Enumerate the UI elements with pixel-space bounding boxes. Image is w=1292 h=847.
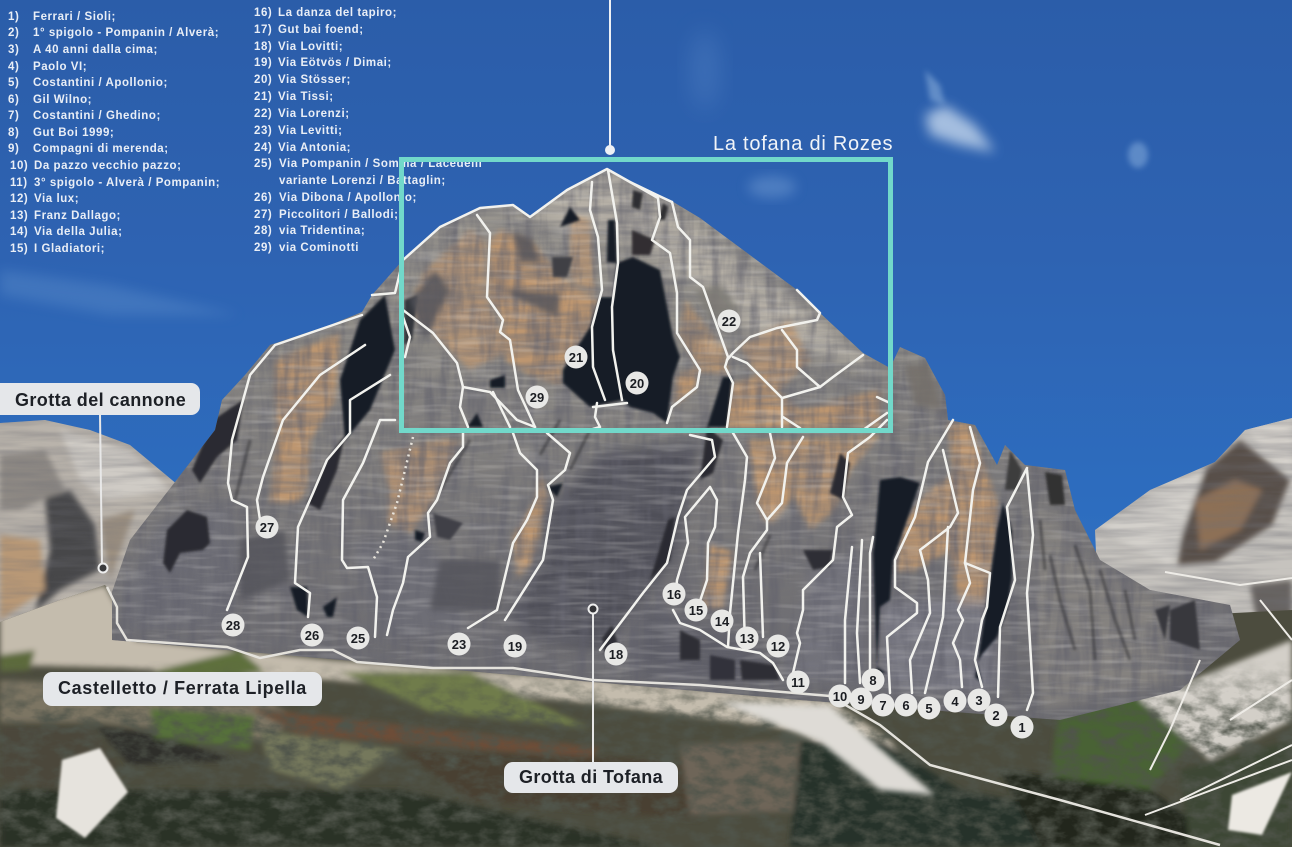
- foreground slopes and forest: [0, 560, 1292, 847]
- route list: column 2: 18): [254, 41, 272, 53]
- grey lower rock: [125, 500, 1180, 710]
- main rock massif: [112, 170, 1240, 720]
- right hills: [1095, 418, 1292, 690]
- route list: column 2: 25): [254, 158, 272, 170]
- route number markers: 11: [791, 675, 805, 690]
- callout: Grotta del cannone: [0, 383, 200, 572]
- right hills shading: [1095, 418, 1292, 613]
- callout: Grotta del cannone: Grotta del cannone: [15, 390, 186, 410]
- route number markers: 14: [715, 614, 730, 629]
- route list: column 1: 5): [8, 77, 19, 89]
- route list: column 2: Piccolitori / Ballodi;: [279, 209, 398, 221]
- route list: column 1: 13): [10, 210, 28, 222]
- route number markers: 18: [609, 647, 623, 662]
- route list: column 1: Compagni di merenda;: [33, 143, 169, 155]
- heading: La tofana di Rozes: La tofana di Rozes: [713, 133, 893, 155]
- rock strata texture: [120, 172, 1180, 696]
- route number markers: 4: [951, 694, 959, 709]
- route number markers: 1: [1018, 720, 1026, 735]
- route list: column 1: 4): [8, 61, 19, 73]
- route list: column 2: 22): [254, 108, 272, 120]
- route list: column 1: Via lux;: [34, 193, 79, 205]
- route number markers: [222, 310, 1034, 738]
- route list: column 2: Via Lorenzi;: [278, 108, 350, 120]
- route number markers: 16: [667, 587, 681, 602]
- route list: column 2: 26): [254, 192, 272, 204]
- route list: column 1: 3° spigolo - Alverà / Pompanin;: [34, 177, 220, 189]
- route list: column 2: 19): [254, 57, 272, 69]
- left hills shading: [0, 415, 180, 630]
- route number markers: 21: [569, 350, 583, 365]
- route list: column 1: 11): [10, 177, 28, 189]
- dark grey blotches: [240, 232, 942, 610]
- route list: column 1: Paolo VI;: [33, 61, 87, 73]
- route list: column 2: Via Tissi;: [278, 91, 334, 103]
- route number markers: 15: [689, 603, 703, 618]
- route number markers: 3: [975, 693, 983, 708]
- route number markers: 7: [879, 698, 887, 713]
- route list: column 1: Franz Dallago;: [34, 210, 121, 222]
- route list: column 2: Gut bai foend;: [278, 24, 364, 36]
- route list: column 1: 9): [8, 143, 19, 155]
- highlight box: La tofana di Rozes: [402, 160, 890, 430]
- route list: column 1: 12): [10, 193, 28, 205]
- route list: column 2: 27): [254, 209, 272, 221]
- route list: column 2: via Tridentina;: [279, 225, 365, 237]
- route list: column 1: I Gladiatori;: [34, 243, 105, 255]
- route list: column 2: [254, 7, 482, 254]
- dark cliffs and shadows: [163, 190, 1200, 683]
- route list: column 2: 23): [254, 125, 272, 137]
- route list: column 1: A 40 anni dalla cima;: [33, 44, 158, 56]
- route number markers: 27: [260, 520, 274, 535]
- route list: column 2: La danza del tapiro;: [278, 7, 397, 19]
- route list: column 1: 7): [8, 110, 19, 122]
- route list: column 2: Via Pompanin / Somma / Lacedelli: [279, 158, 482, 170]
- route list: column 1: Ferrari / Sioli;: [33, 11, 116, 23]
- route list: column 2: via Cominotti: [279, 242, 359, 254]
- route list: column 2: Via Dibona / Apollonio;: [279, 192, 417, 204]
- route number markers: 29: [530, 390, 544, 405]
- route list: column 1: Da pazzo vecchio pazzo;: [34, 160, 181, 172]
- route list: column 1: Costantini / Ghedino;: [33, 110, 161, 122]
- callout line to highlighted area: [605, 0, 615, 155]
- callout: Grotta di Tofana: [504, 604, 678, 793]
- route list: column 1: Gut Boi 1999;: [33, 127, 114, 139]
- climbing routes: [227, 169, 1033, 710]
- route list: column 1: 2): [8, 27, 19, 39]
- route number markers: 22: [722, 314, 736, 329]
- route list: column 2: 16): [254, 7, 272, 19]
- callout: Castelletto / Ferrata Lipella: Castelletto / Ferrata Lipella: [58, 678, 307, 698]
- route number markers: 5: [925, 701, 933, 716]
- route number markers: 20: [630, 376, 644, 391]
- route number markers: 19: [508, 639, 522, 654]
- trail: [107, 587, 1220, 845]
- orange rock patches: [270, 215, 998, 620]
- route number markers: 25: [351, 631, 365, 646]
- route number markers: 9: [857, 692, 865, 707]
- route list: column 2: Via Antonia;: [278, 142, 351, 154]
- route list: column 2: 28): [254, 225, 272, 237]
- route number markers: 13: [740, 631, 754, 646]
- route list: column 1: Via della Julia;: [34, 226, 122, 238]
- left hills: [0, 420, 178, 625]
- thin rock streaks: [235, 420, 1135, 660]
- route number markers: 23: [452, 637, 466, 652]
- route list: column 2: 21): [254, 91, 272, 103]
- route list: column 1: 1): [8, 11, 19, 23]
- route number markers: 28: [226, 618, 240, 633]
- route list: column 1: [8, 11, 220, 255]
- callout: Grotta di Tofana: Grotta di Tofana: [519, 767, 664, 787]
- route list: column 2: Via Eötvös / Dimai;: [278, 57, 392, 69]
- route number markers: 10: [833, 689, 847, 704]
- route list: column 2: 17): [254, 24, 272, 36]
- route list: column 2: Via Lovitti;: [278, 41, 343, 53]
- route list: column 1: 1° spigolo - Pompanin / Alverà;: [33, 27, 219, 39]
- route list: column 2: Via Stösser;: [278, 74, 351, 86]
- route list: column 2: 29): [254, 242, 272, 254]
- upper-face lighter limestone: [530, 169, 880, 370]
- route list: column 2: Via Levitti;: [278, 125, 343, 137]
- route list: column 1: 10): [10, 160, 28, 172]
- route list: column 2: 20): [254, 74, 272, 86]
- route list: column 2: 24): [254, 142, 272, 154]
- right-side paths: [1145, 572, 1292, 815]
- route number markers: 8: [869, 673, 877, 688]
- route list: column 1: 8): [8, 127, 19, 139]
- route number markers: 26: [305, 628, 319, 643]
- route number markers: 6: [902, 698, 910, 713]
- route list: column 1: 15): [10, 243, 28, 255]
- route number markers: 12: [771, 639, 785, 654]
- route number markers: 2: [992, 708, 1000, 723]
- route list: column 1: 6): [8, 94, 19, 106]
- route list: column 1: Costantini / Apollonio;: [33, 77, 168, 89]
- route list: column 1: Gil Wilno;: [33, 94, 92, 106]
- route list: column 2: variante Lorenzi / Battaglin;: [279, 175, 446, 187]
- route list: column 1: 3): [8, 44, 19, 56]
- callout: Castelletto / Ferrata Lipella: [43, 672, 322, 706]
- route list: column 1: 14): [10, 226, 28, 238]
